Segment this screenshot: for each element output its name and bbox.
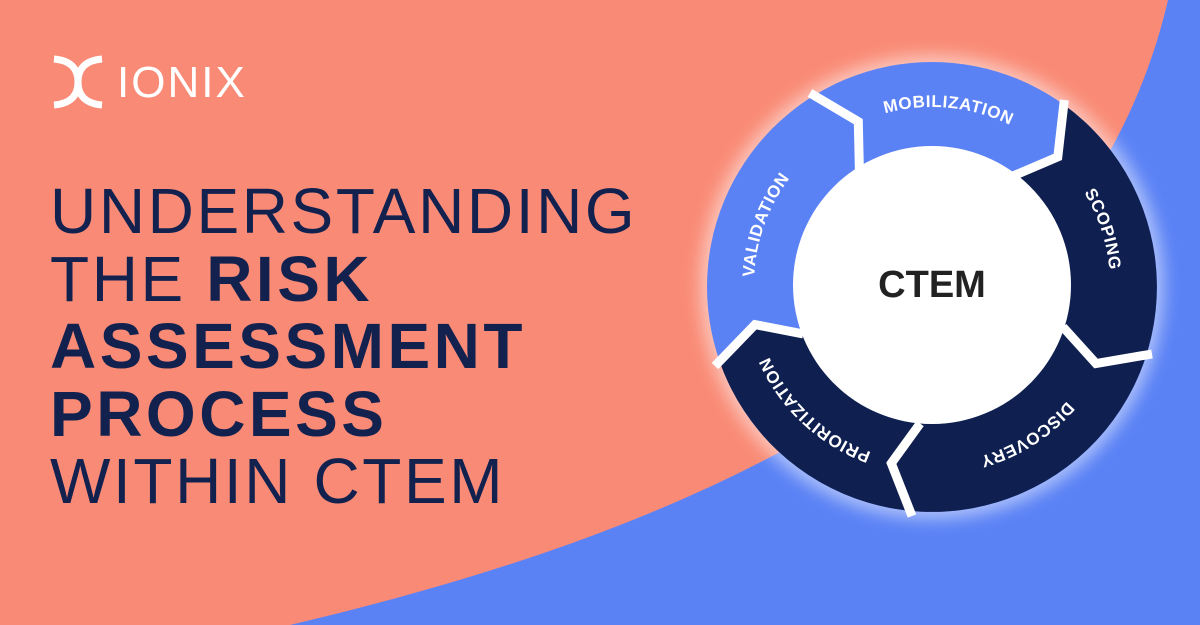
segment labels (742, 95, 1120, 468)
title: ASSESSMENT (50, 310, 526, 382)
segment labels: DISCOVERY (984, 402, 1075, 468)
segment labels: MOBILIZATION (883, 95, 1014, 124)
title: PROCESS (50, 378, 387, 450)
center circle (793, 146, 1071, 424)
ring: navy segments (720, 105, 1157, 512)
logo text: IONIX (117, 58, 247, 107)
logo (54, 56, 247, 108)
segment labels: PRIORITIZATION (759, 358, 870, 463)
segment labels: VALIDATION (742, 172, 789, 276)
title (50, 175, 637, 517)
center label: CTEM (878, 264, 986, 306)
title: WITHIN CTEM (50, 445, 505, 517)
icon: ionix mark (54, 56, 102, 108)
title: THE RISK (50, 242, 373, 314)
title: UNDERSTANDING (50, 175, 637, 247)
segment labels: SCOPING (1086, 188, 1120, 268)
ring: light blue segments (707, 62, 1157, 512)
